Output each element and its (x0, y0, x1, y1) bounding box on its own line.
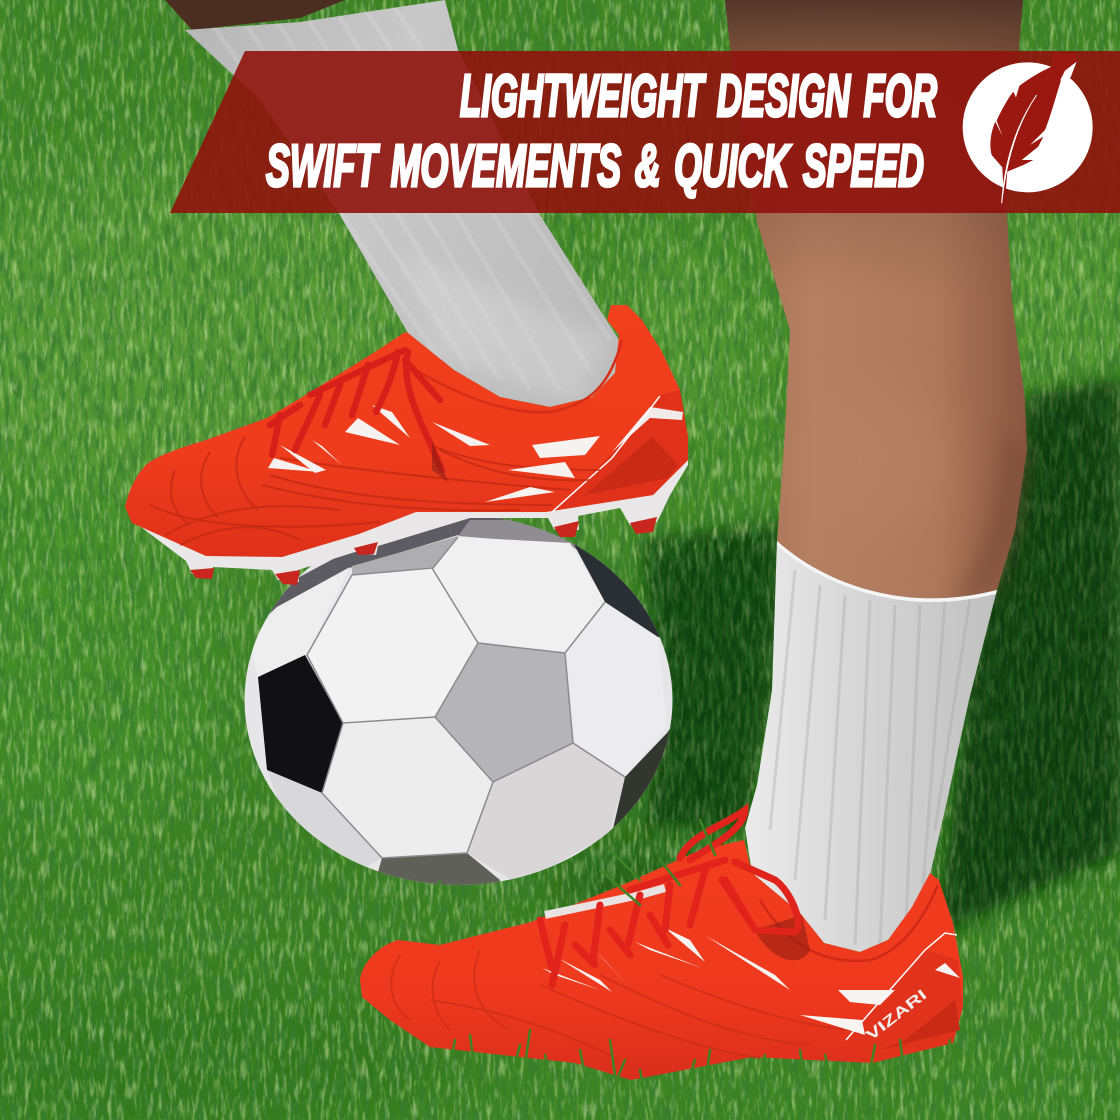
ball panel: lower left crescent (267, 770, 382, 870)
banner (170, 51, 1120, 213)
ball panel: lower left hexagon (322, 717, 493, 858)
lower cleat: collar line (760, 885, 938, 961)
lower cleat: brand lettering: VIZARI (863, 986, 930, 1044)
ball panel: grey pentagon (435, 643, 573, 782)
upper cleat: textured stripes (150, 437, 600, 545)
ball panel: top hexagon (433, 537, 605, 653)
upper cleat (125, 305, 688, 585)
upper cleat: heel counter (555, 390, 688, 510)
upper cleat: sole (129, 455, 688, 582)
ball panel: dark lower right (613, 728, 670, 828)
upper cleat: white graphic (268, 405, 600, 502)
ball panel: dark upper right (574, 544, 660, 638)
banner background (170, 51, 1120, 213)
icon: feather in white circle (963, 53, 1093, 203)
upper cleat: body (125, 305, 688, 557)
lower cleat: lace shadow (755, 915, 810, 960)
lower cleat: laces (540, 810, 798, 985)
ball panel: left white (250, 567, 350, 677)
lower cleat: body (360, 840, 963, 1080)
upper cleat: stud tips (190, 517, 657, 585)
lower cleat: white graphic (542, 928, 960, 1035)
lower cleat: tongue (545, 888, 665, 915)
right sock (740, 530, 1005, 960)
ball panel: black pentagon (258, 655, 343, 793)
lower cleat: heel counter (842, 950, 963, 1063)
ball: dark shade under cleat (269, 518, 575, 614)
upper cleat: collar lining (412, 340, 622, 412)
lower cleat: textured stripes (391, 950, 850, 1060)
upper cleat: laces (270, 350, 442, 470)
ball: grey top panel (352, 536, 458, 575)
lower cleat (360, 810, 963, 1080)
ball panel: left big hexagon (307, 568, 478, 723)
ball panel: shaded bottom (378, 854, 500, 885)
soccer ball (244, 518, 672, 885)
foreground grass blades (300, 820, 975, 1120)
left sock (185, 0, 618, 407)
right leg skin (725, 0, 1027, 605)
ball panel: lower right hexagon (467, 743, 625, 885)
left leg skin (165, 0, 345, 30)
ball panel: right hexagon (565, 602, 667, 777)
